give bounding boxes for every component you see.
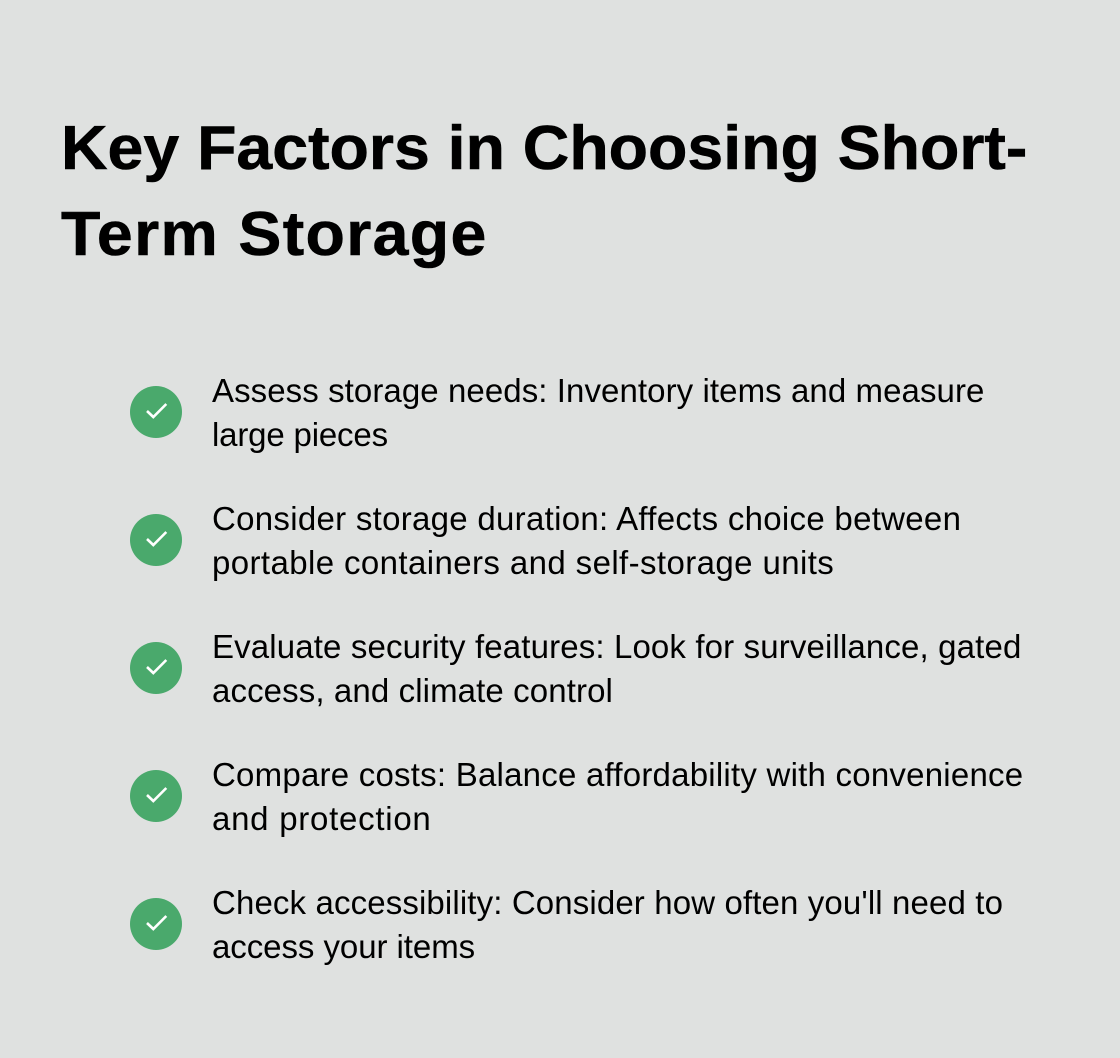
item: check accessibility: Check accessibility: Consider how often you'll need to <box>212 884 1003 921</box>
item: consider storage duration: Consider storage duration: Affects choice between <box>212 500 961 537</box>
item: compare costs <box>130 756 1023 837</box>
title <box>61 114 1027 269</box>
item: assess storage needs <box>130 372 984 453</box>
item: consider storage duration <box>130 500 961 581</box>
item: assess storage needs: Assess storage needs: Inventory items and measure <box>212 372 984 409</box>
title: Term Storage <box>61 200 488 269</box>
item: evaluate security features <box>130 628 1021 709</box>
item: evaluate security features: Evaluate security features: Look for surveillance, gated <box>212 628 1021 665</box>
item: compare costs: and protection <box>212 800 432 837</box>
item: assess storage needs: large pieces <box>212 416 388 453</box>
item: compare costs: Compare costs: Balance affordability with convenience <box>212 756 1023 793</box>
item: evaluate security features: access, and climate control <box>212 672 613 709</box>
title: Key Factors in Choosing Short- <box>61 114 1027 183</box>
item: check accessibility <box>130 884 1003 965</box>
item: check accessibility: access your items <box>212 928 475 965</box>
item: consider storage duration: portable containers and self-storage units <box>212 544 834 581</box>
